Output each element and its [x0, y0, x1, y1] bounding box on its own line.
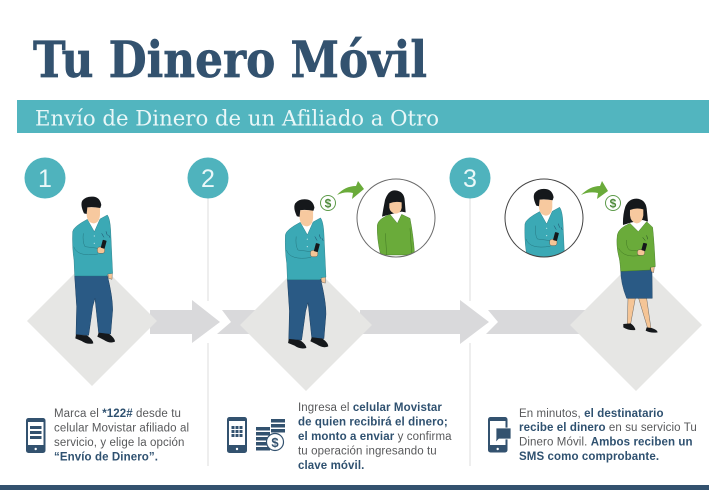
dollar badge step 2: $ [325, 196, 332, 210]
text: step 1: celular Movistar afiliado al [54, 422, 189, 434]
text: step 2: clave móvil. [298, 460, 364, 472]
text: step 2: de quien recibirá el dinero; [298, 416, 448, 428]
figure: man step 1 [72, 197, 115, 344]
text: step 3: SMS como comprobante. [519, 451, 659, 463]
dollar badge step 3: $ [610, 196, 617, 210]
title: Tu Dinero Móvil [33, 30, 427, 89]
step number 1 [24, 158, 66, 198]
subtitle banner: Envío de Dinero de un Afiliado a Otro [35, 106, 439, 130]
diamond 2 [240, 259, 372, 391]
step number 1: 1 [38, 165, 52, 193]
flow arrows [150, 300, 590, 344]
icon: coins: $ [271, 435, 279, 450]
step number 3 [450, 158, 490, 198]
icon: coins [256, 419, 285, 450]
step number 2: 2 [201, 165, 215, 193]
dollar badge step 3 [606, 196, 620, 210]
woman bust [377, 190, 415, 255]
icon: phone with keypad [227, 417, 247, 453]
subtitle banner [17, 100, 709, 133]
text: step 3: recibe el dinero en su servicio Tu [519, 422, 697, 434]
recipient circle step 2 [357, 179, 435, 257]
text: step 2: tu operación ingresando tu [298, 446, 437, 458]
text: step 3: Dinero Móvil. Ambos reciben un [519, 436, 693, 448]
dollar badge step 2 [320, 196, 336, 210]
text: step 1: “Envío de Dinero”. [54, 452, 158, 464]
figure: woman step 3 [617, 199, 658, 333]
figure: man step 2 [285, 199, 328, 349]
icon: phone with message [488, 417, 511, 452]
diamond 3 [570, 259, 702, 391]
green arrow step 2 [337, 181, 364, 199]
icon: phone with list [26, 418, 46, 453]
text: step 2: Ingresa el celular Movistar [298, 402, 442, 414]
step number 3: 3 [463, 165, 477, 193]
bottom bar [0, 485, 709, 490]
text: step 2: el monto a enviar y confirma [298, 431, 452, 443]
text: step 1: servicio, y elige la opción [54, 437, 185, 449]
step number 2 [188, 158, 228, 198]
green arrow step 3 [581, 181, 608, 199]
text: step 3: En minutos, el destinatario [519, 408, 664, 420]
sender circle step 3 [504, 178, 584, 258]
step dividers [208, 190, 470, 466]
text: step 1: Marca el *122# desde tu [54, 408, 181, 420]
diamond 1 [27, 256, 157, 386]
